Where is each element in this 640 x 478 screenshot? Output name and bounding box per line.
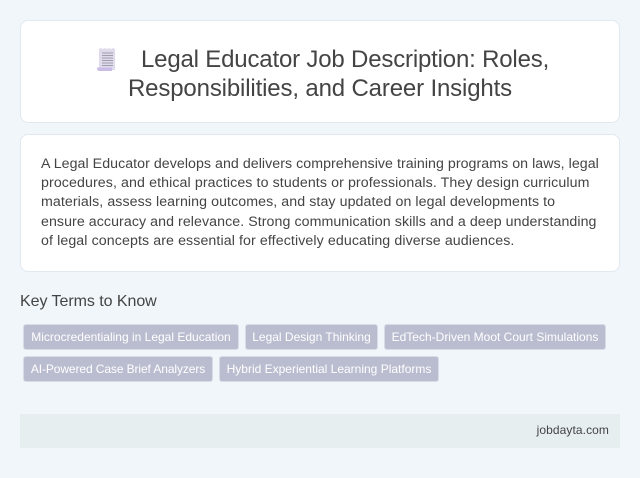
description text: procedures, and ethical practices to students or professionals. They design curriculum <box>41 175 590 191</box>
tag <box>245 324 378 350</box>
heading: Responsibilities, and Career Insights <box>128 75 512 102</box>
description text: A Legal Educator develops and delivers comprehensive training programs on laws, legal <box>41 156 599 172</box>
description text: of legal concepts are essential for effectively educating diverse audiences. <box>41 233 514 249</box>
tag <box>23 356 213 382</box>
tag: Legal Design Thinking <box>252 330 371 344</box>
tag: Microcredentialing in Legal Education <box>31 330 231 344</box>
tag: Hybrid Experiential Learning Platforms <box>227 362 431 376</box>
heading: Legal Educator Job Description: Roles, <box>141 46 549 73</box>
tag <box>384 324 606 350</box>
description text: materials, assess learning outcomes, and stay updated on legal developments to <box>41 194 555 210</box>
footer bar <box>20 414 620 448</box>
section heading: key terms: Key Terms to Know <box>20 293 157 310</box>
footer source text: jobdayta.com <box>537 423 609 437</box>
tag: AI-Powered Case Brief Analyzers <box>31 362 205 376</box>
tag list <box>23 324 606 382</box>
icon: scroll document <box>97 48 115 71</box>
tag: EdTech-Driven Moot Court Simulations <box>392 330 598 344</box>
description text: ensure accuracy and relevance. Strong communication skills and a deep understanding <box>41 214 597 230</box>
heading <box>128 46 549 102</box>
description text <box>41 156 599 249</box>
title card <box>20 20 620 123</box>
tag <box>219 356 439 382</box>
tag <box>23 324 239 350</box>
description card <box>20 134 620 272</box>
